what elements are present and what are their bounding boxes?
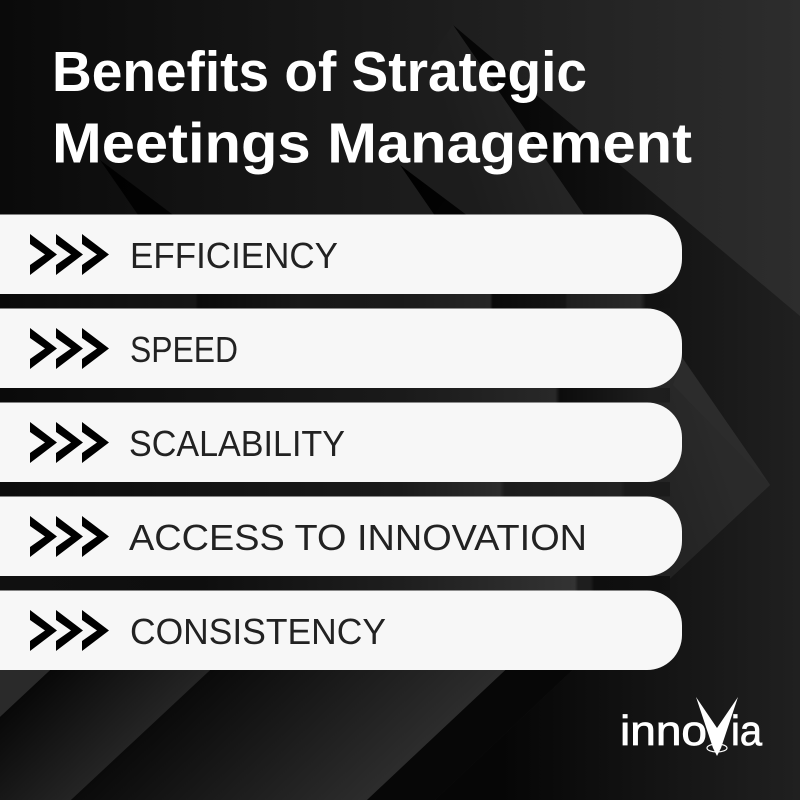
benefit row: efficiency — [0, 214, 682, 294]
benefit row: speed — [0, 308, 682, 388]
title: Benefits of Strategic — [52, 40, 587, 104]
logo: innovia: inno — [620, 707, 707, 754]
logo: innovia — [620, 697, 763, 756]
icon: triple chevron — [30, 516, 109, 557]
icon: triple chevron — [30, 328, 109, 369]
title — [52, 40, 692, 176]
benefit row: consistency — [0, 590, 682, 670]
icon: triple chevron — [30, 234, 109, 275]
benefit row: access to innovation: ACCESS TO INNOVATION — [129, 517, 587, 558]
benefit row: scalability — [0, 402, 682, 482]
benefit row: access to innovation — [0, 496, 682, 576]
icon: triple chevron — [30, 422, 109, 463]
benefit row: consistency: CONSISTENCY — [130, 611, 386, 652]
title: Meetings Management — [52, 112, 692, 176]
benefit row: scalability: SCALABILITY — [129, 423, 345, 464]
icon: triple chevron — [30, 610, 109, 651]
benefit row: speed: SPEED — [130, 329, 238, 370]
logo: innovia: ia — [731, 707, 763, 754]
benefit row: efficiency: EFFICIENCY — [130, 235, 338, 276]
